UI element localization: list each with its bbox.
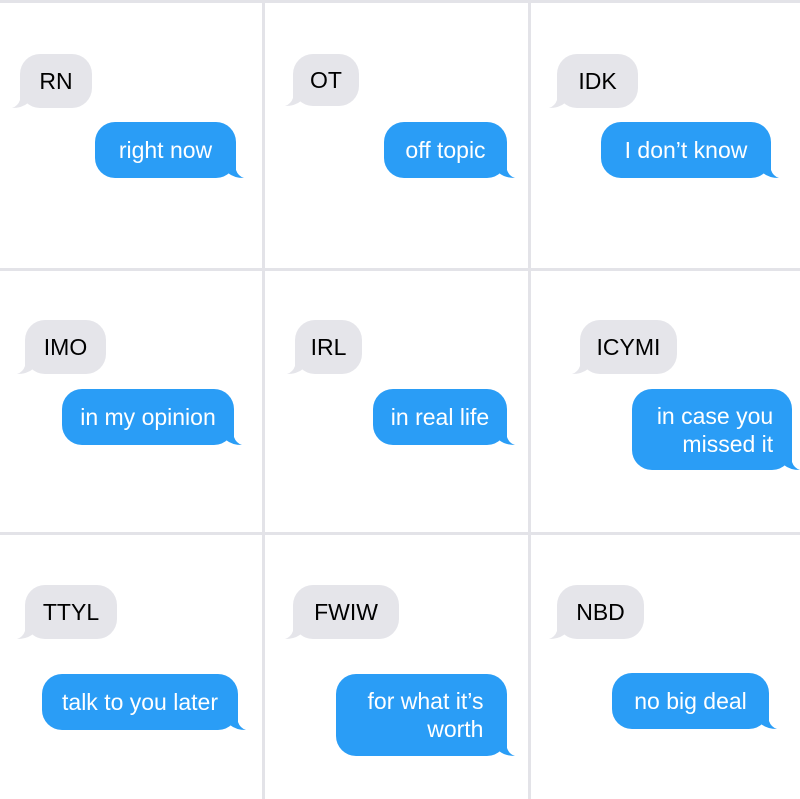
bubble: in real life (373, 389, 507, 445)
panel: TTYL (18, 585, 246, 730)
bubble: in my opinion (62, 389, 234, 445)
panel: IDK (550, 54, 779, 178)
panel: RN (12, 54, 244, 178)
bubble: RN: RN (39, 68, 73, 94)
bubble: in case you missed it: missed it (682, 430, 773, 456)
panel: ICYMI (572, 320, 800, 470)
bubble: IDK: IDK (578, 68, 617, 94)
bubble: off topic (384, 122, 507, 178)
bubble: IMO: IMO (44, 334, 87, 360)
bubble: FWIW (293, 585, 399, 639)
bubble: ICYMI: ICYMI (597, 334, 660, 360)
bubble: in case you missed it: in case you (657, 402, 773, 428)
bubble: no big deal: no big deal (634, 688, 747, 714)
bubble: OT (293, 54, 359, 106)
bubble: FWIW: FWIW (314, 599, 378, 625)
bubble: in real life: in real life (391, 404, 489, 430)
bubble: in my opinion: in my opinion (80, 404, 216, 430)
bubble: off topic: off topic (405, 137, 486, 163)
bubble: TTYL (25, 585, 117, 639)
bubble: RN (20, 54, 92, 108)
bubble: for what it's worth: for what it’s (368, 688, 483, 714)
bubble: no big deal (612, 673, 769, 729)
panel: FWIW (286, 585, 515, 756)
panel: NBD (550, 585, 777, 729)
bubble: for what it's worth (336, 674, 507, 756)
bubble: right now (95, 122, 236, 178)
bubble: I don't know (601, 122, 771, 178)
bubble: IMO (25, 320, 106, 374)
bubble: talk to you later (42, 674, 238, 730)
panel: OT (286, 54, 515, 178)
bubble: right now: right now (119, 137, 212, 163)
bubble: NBD: NBD (576, 599, 625, 625)
bubble: NBD (557, 585, 644, 639)
bubble: ICYMI (580, 320, 677, 374)
bubble: OT: OT (310, 67, 342, 93)
bubble: talk to you later: talk to you later (62, 689, 218, 715)
bubble: in case you missed it (632, 389, 792, 470)
bubble: IRL (295, 320, 362, 374)
panel: IRL (288, 320, 515, 445)
bubble: I don't know: I don’t know (625, 137, 747, 163)
panel: IMO (18, 320, 242, 445)
bubble: for what it's worth: worth (427, 716, 483, 742)
bubble: TTYL: TTYL (43, 599, 99, 625)
bubble: IDK (557, 54, 638, 108)
bubble: IRL: IRL (311, 334, 346, 360)
